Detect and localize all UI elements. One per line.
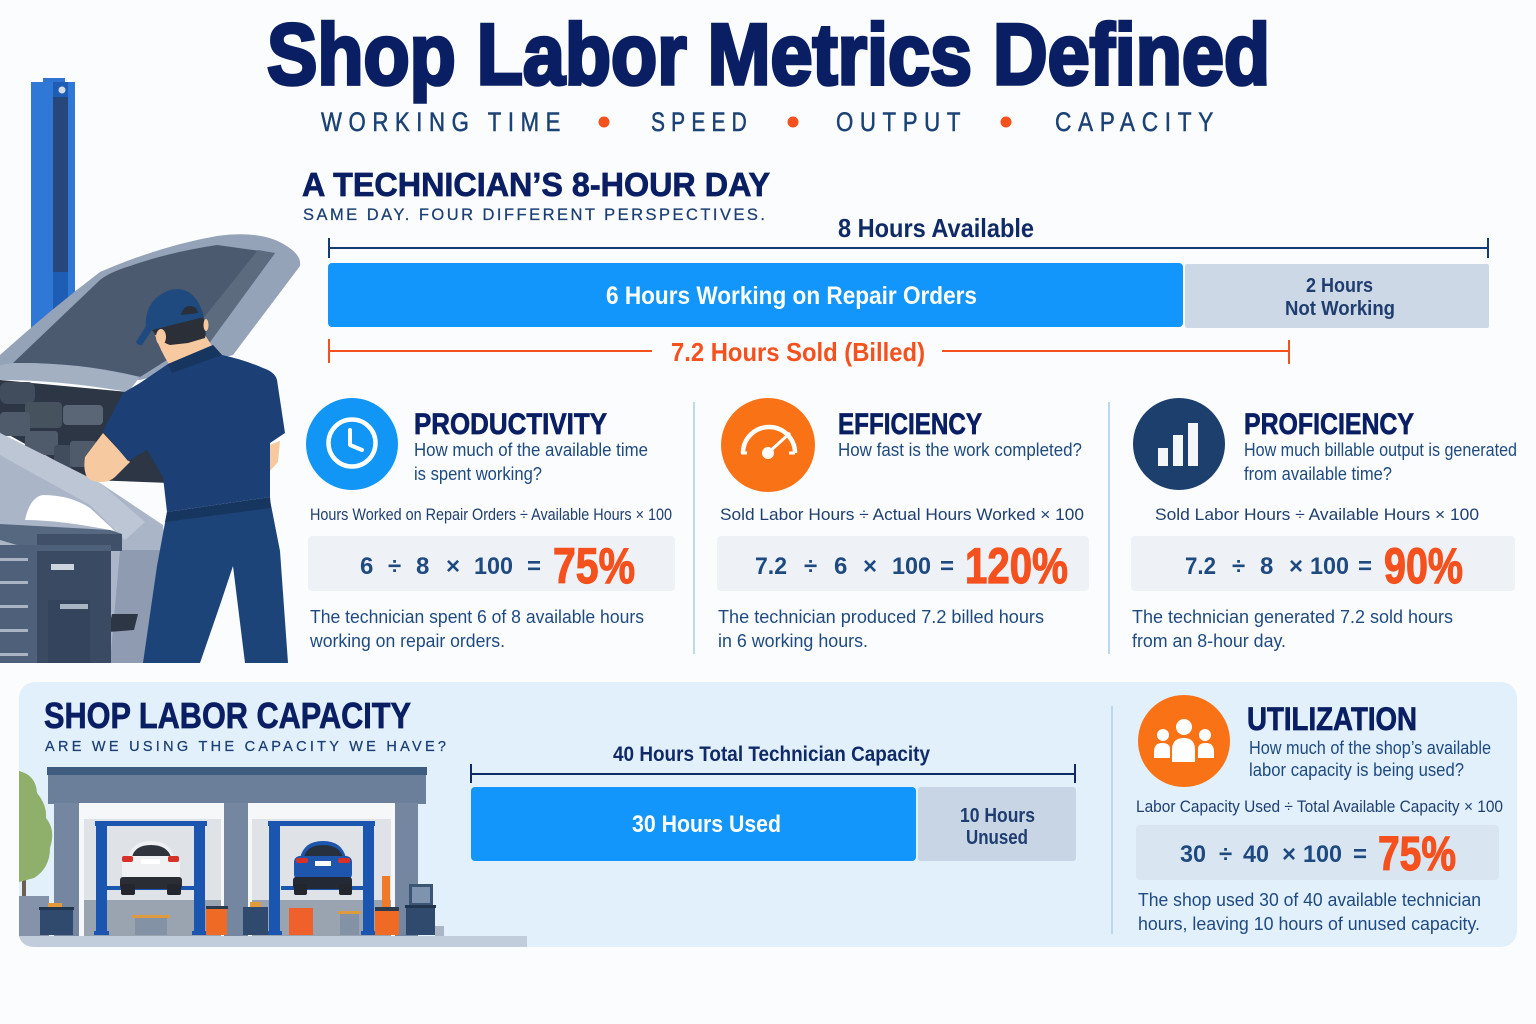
subtitle: four themes [321, 107, 1220, 137]
bar: 2 hours not working: Not Working [1285, 298, 1395, 320]
capacity bracket: 40 hours [471, 743, 1075, 783]
description [718, 607, 1044, 651]
building [47, 767, 427, 936]
calculation box: = [940, 553, 954, 580]
capacity bracket: 40 hours: 40 Hours Total Technician Capacity [613, 743, 930, 766]
tree [19, 771, 52, 898]
calculation box: = [1358, 553, 1372, 580]
formula: Sold Labor Hours ÷ Available Hours × 100 [1155, 505, 1479, 524]
calculation box [1131, 536, 1515, 594]
bar: 2 hours not working: 2 Hours [1306, 275, 1373, 297]
calculation box: = [527, 553, 541, 580]
bar: 10 hours unused: 10 Hours [960, 805, 1035, 827]
panel: efficiency [717, 398, 1089, 651]
calculation box: 75% [1378, 828, 1456, 881]
calculation box: 90% [1384, 538, 1463, 594]
question [1249, 738, 1491, 780]
subheading: ARE WE USING THE CAPACITY WE HAVE? [45, 739, 446, 755]
description: The technician spent 6 of 8 available hours [310, 607, 644, 627]
bar: 2 hours not working [1185, 264, 1489, 328]
panel: proficiency [1131, 398, 1517, 651]
subtitle: four themes: CAPACITY [1055, 107, 1220, 137]
calculation box: ÷ [1219, 841, 1232, 868]
description: working on repair orders. [309, 631, 505, 651]
calculation box: ÷ [1232, 553, 1245, 580]
bar: 10 hours unused [918, 787, 1076, 861]
calculation box: × [1289, 553, 1303, 580]
description: The technician produced 7.2 billed hours [718, 607, 1044, 627]
formula: Hours Worked on Repair Orders ÷ Available Hours × 100 [310, 505, 672, 524]
calculation box: 100 [892, 553, 931, 580]
calculation box: × [1282, 841, 1296, 868]
description: hours, leaving 10 hours of unused capacity. [1138, 914, 1480, 934]
bar: 6 hours working: 6 Hours Working on Repair Orders [606, 282, 977, 310]
calculation box: 8 [416, 553, 429, 580]
icon: clock [306, 398, 398, 490]
heading: SHOP LABOR CAPACITY [44, 695, 411, 736]
engine bay [0, 380, 170, 483]
car front body [0, 433, 175, 663]
bar: 6 hours working [328, 263, 1183, 327]
title: Shop Labor Metrics Defined [267, 7, 1270, 103]
lift 1 [94, 821, 207, 935]
lift 2 [267, 821, 376, 935]
timeline: 8 hours available bracket [329, 213, 1488, 258]
description [309, 607, 644, 651]
calculation box [717, 536, 1089, 594]
heading: EFFICIENCY [838, 408, 982, 441]
formula: Sold Labor Hours ÷ Actual Hours Worked × 100 [720, 505, 1084, 524]
calculation box: × [446, 553, 460, 580]
question [414, 440, 648, 484]
calculation box: 7.2 [1185, 553, 1216, 580]
question: How much of the shop’s available [1249, 738, 1491, 758]
question: labor capacity is being used? [1249, 760, 1464, 780]
section heading: technician's day: A TECHNICIAN’S 8-HOUR DAY [302, 166, 770, 203]
calculation box: ÷ [388, 553, 401, 580]
question [1244, 440, 1517, 484]
icon: speedometer [721, 398, 815, 492]
tool carts and benches [39, 876, 444, 936]
description: The technician generated 7.2 sold hours [1132, 607, 1453, 627]
description: in 6 working hours. [718, 631, 868, 651]
calculation box: 6 [360, 553, 373, 580]
calculation box [308, 536, 675, 594]
calculation box: = [1353, 841, 1367, 868]
bar: 30 hours used: 30 Hours Used [632, 811, 781, 838]
calculation box: 100 [1303, 841, 1342, 868]
heading: UTILIZATION [1247, 701, 1417, 737]
calculation box: 100 [474, 553, 513, 580]
calculation box: 6 [834, 553, 847, 580]
technician figure [84, 289, 288, 663]
timeline: 8 hours available bracket: 8 Hours Available [838, 213, 1034, 243]
calculation box: 8 [1260, 553, 1273, 580]
subtitle: four themes: WORKING TIME [321, 107, 567, 137]
icon: people group [1138, 695, 1230, 787]
bracket: 7.2 hours sold [329, 337, 1289, 367]
calculation box: 7.2 [755, 553, 787, 580]
car hood [0, 234, 300, 392]
description [1132, 607, 1453, 651]
calculation box: ÷ [804, 553, 817, 580]
section subheading: SAME DAY. FOUR DIFFERENT PERSPECTIVES. [303, 206, 765, 224]
subtitle: four themes: OUTPUT [836, 107, 967, 137]
question: How much of the available time [414, 440, 648, 460]
calculation box [1136, 825, 1499, 881]
bar: 30 hours used [471, 787, 916, 861]
calculation box: 40 [1243, 841, 1269, 868]
panel: utilization [1136, 695, 1503, 934]
heading: PROFICIENCY [1244, 408, 1414, 441]
calculation box: 100 [1310, 553, 1349, 580]
calculation box: × [863, 553, 877, 580]
bracket: 7.2 hours sold: 7.2 Hours Sold (Billed) [671, 337, 925, 367]
calculation box: 30 [1180, 841, 1206, 868]
illustration: technician working under a car hood [0, 78, 300, 663]
bar: 10 hours unused: Unused [966, 827, 1028, 849]
panel: productivity [306, 398, 675, 651]
calculation box: 75% [553, 538, 635, 594]
ground strip [19, 936, 527, 947]
panel: shop labor capacity [19, 682, 1517, 947]
question: from available time? [1244, 464, 1392, 484]
icon: bar chart [1133, 398, 1225, 490]
car: white [120, 841, 182, 895]
heading: PRODUCTIVITY [414, 408, 607, 441]
description: The shop used 30 of 40 available technician [1138, 890, 1481, 910]
subtitle: four themes: SPEED [651, 107, 753, 137]
formula: Labor Capacity Used ÷ Total Available Capacity × 100 [1136, 797, 1503, 816]
question: How fast is the work completed? [838, 440, 1082, 460]
question: is spent working? [414, 464, 542, 484]
description [1138, 890, 1481, 934]
car: blue [293, 841, 352, 895]
calculation box: 120% [965, 538, 1068, 594]
icon: blue lift column [31, 78, 75, 332]
illustration: two-bay shop building [19, 767, 527, 947]
description: from an 8-hour day. [1132, 631, 1286, 651]
tool chest [0, 524, 122, 663]
